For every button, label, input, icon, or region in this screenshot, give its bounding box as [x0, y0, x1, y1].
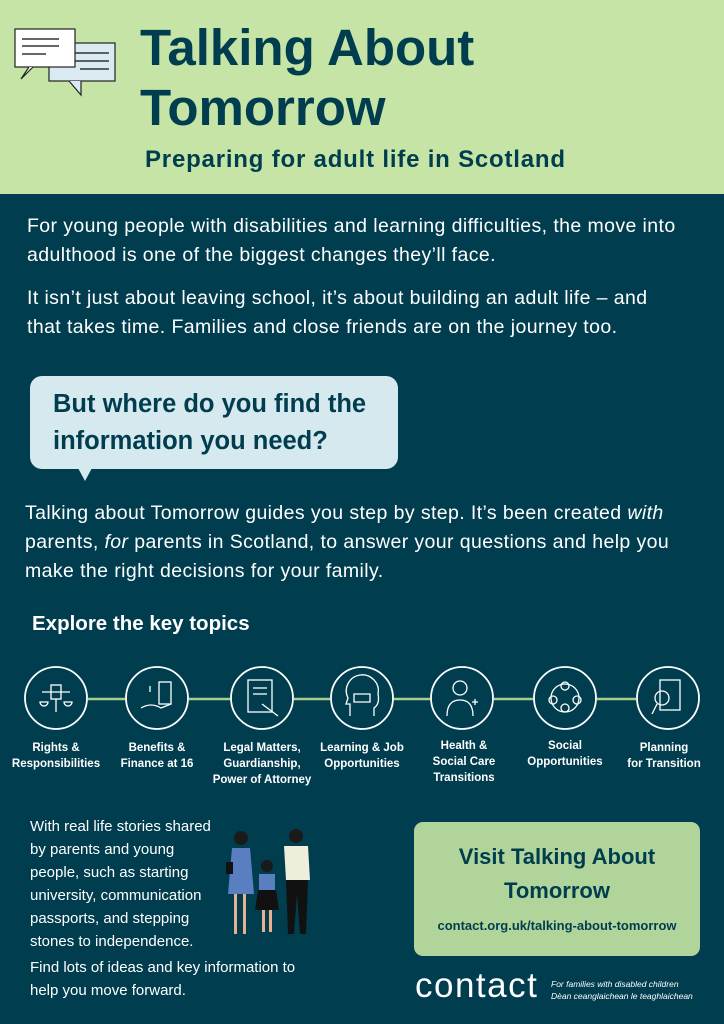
icon: speech bubbles [14, 28, 116, 96]
title: Tomorrow [140, 79, 386, 136]
topics timeline: Social Care [433, 756, 495, 768]
subtitle: Preparing for adult life in Scotland [145, 146, 566, 173]
callout: speech bubble question: But where do you find the [53, 390, 366, 418]
text: guide description: parents, for parents in Scotland, to answer your questions and help you [25, 531, 669, 553]
panel: visit link [414, 822, 700, 956]
text: guide description: make the right decisions for your family. [25, 560, 384, 582]
topics timeline: Benefits & [129, 742, 185, 754]
panel: visit link: contact.org.uk/talking-about-tomorrow [437, 918, 677, 933]
text: real life stories [30, 818, 295, 999]
intro text [27, 215, 676, 338]
topics timeline: Learning & Job [320, 742, 404, 754]
header panel [0, 0, 724, 194]
topics timeline [12, 666, 701, 786]
title: Talking About [140, 19, 474, 76]
labels [12, 742, 100, 770]
text: real life stories: passports, and stepping [30, 910, 189, 927]
intro text: adulthood is one of the biggest changes they’ll face. It isn’t just about leaving school, it’s about building an adult life – and [27, 244, 647, 309]
callout: speech bubble question: information you need? [53, 427, 328, 455]
topics timeline: Finance at 16 [121, 758, 193, 770]
title [140, 19, 474, 136]
heading: explore: Explore the key topics [32, 612, 250, 635]
topics timeline: Guardianship, [223, 758, 301, 770]
intro text: that takes time. Families and close friends are on the journey too. [27, 316, 617, 338]
logo: contact: contact [415, 966, 538, 1005]
topics timeline: Planning [640, 742, 688, 754]
callout: speech bubble question [30, 376, 398, 469]
topics timeline: Opportunities [324, 758, 400, 770]
labels: Rights & [32, 742, 80, 754]
illustration: family [226, 829, 310, 934]
topics timeline: Legal Matters, [223, 742, 301, 754]
topics timeline: Health & [441, 740, 487, 752]
labels: Responsibilities [12, 758, 100, 770]
topics timeline: Transitions [433, 772, 495, 784]
logo: contact: Dèan ceanglaichean le teaghlaichean [551, 991, 693, 1001]
intro text: For young people with disabilities and learning difficulties, the move into [27, 215, 676, 237]
panel: visit link: Visit Talking About [459, 844, 655, 869]
text: real life stories: by parents and young [30, 841, 174, 858]
text: guide description [25, 502, 669, 582]
logo: contact [415, 966, 693, 1005]
text: guide description: Talking about Tomorrow guides you step by step. It’s been created with [25, 502, 664, 524]
topics timeline: for Transition [627, 758, 701, 770]
topics timeline: Power of Attorney [213, 774, 311, 786]
text: real life stories: university, communication [30, 887, 201, 904]
topics timeline: Social [548, 740, 582, 752]
topics timeline: Opportunities [527, 756, 603, 768]
logo: contact: For families with disabled children [551, 979, 679, 989]
text: real life stories: stones to independence. Find lots of ideas and key information to [30, 933, 295, 976]
panel: visit link: Tomorrow [504, 878, 610, 903]
text: real life stories: people, such as starting [30, 864, 188, 881]
text: real life stories: With real life stories shared [30, 818, 211, 835]
text: real life stories: help you move forward. [30, 982, 186, 999]
